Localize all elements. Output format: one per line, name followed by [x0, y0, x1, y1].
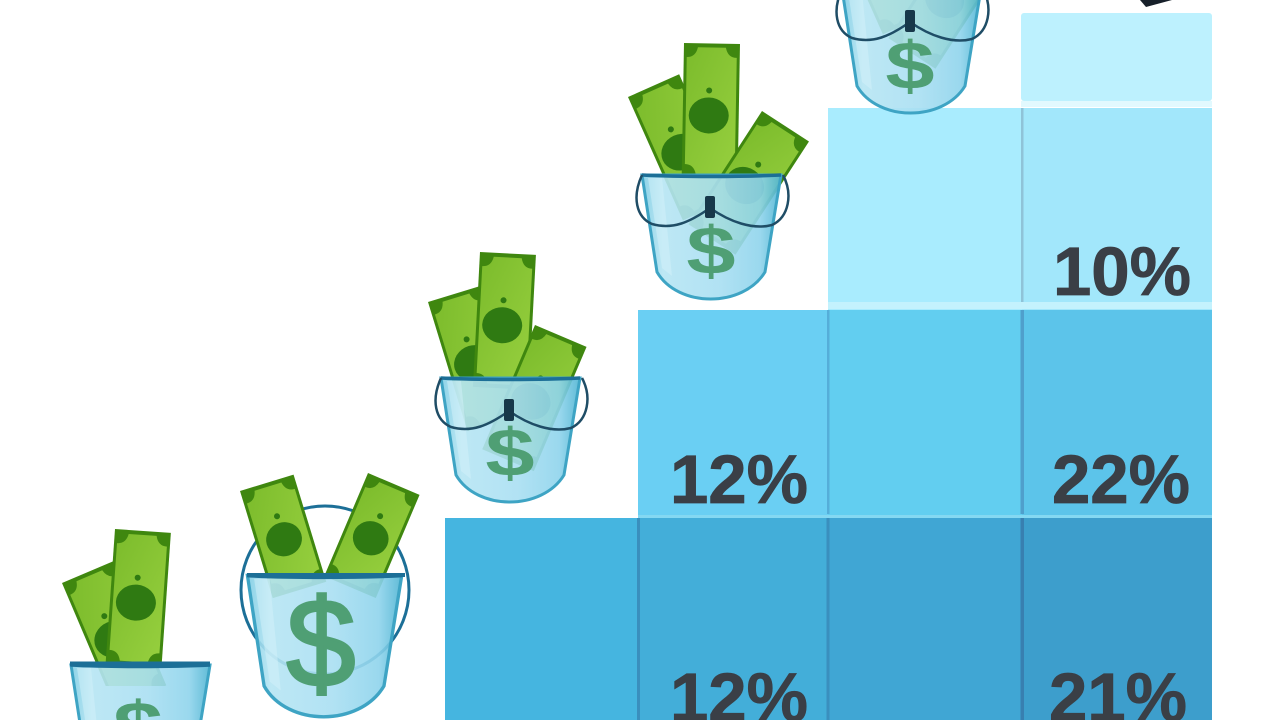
- bottom block row: [445, 518, 1212, 720]
- icon: bucket 3 with money: [428, 252, 587, 502]
- icon: bucket 3 with money: $: [485, 415, 535, 491]
- icon: bucket 2 with money: [240, 473, 420, 717]
- icon: bucket 5 with money, cropped at top: $: [885, 28, 935, 104]
- middle block row: [638, 310, 1212, 518]
- panel: rising block staircase: [445, 13, 1212, 720]
- icon: bucket 2 with money: $: [287, 575, 355, 713]
- icon: bucket 4 with money: [628, 43, 809, 299]
- icon: bucket 1 with money: [62, 529, 210, 720]
- percentage label 12% middle: 12%: [670, 441, 808, 518]
- upper block row: [828, 108, 1212, 310]
- percentage label 10%: 10%: [1053, 233, 1191, 310]
- icon: bucket 5 with money, cropped at top: [828, 0, 1009, 113]
- icon: partial dark object at top edge: [1140, 0, 1172, 7]
- percentage label 22%: 22%: [1052, 441, 1190, 518]
- top block: [1021, 13, 1212, 107]
- icon: bucket 4 with money: $: [686, 213, 736, 289]
